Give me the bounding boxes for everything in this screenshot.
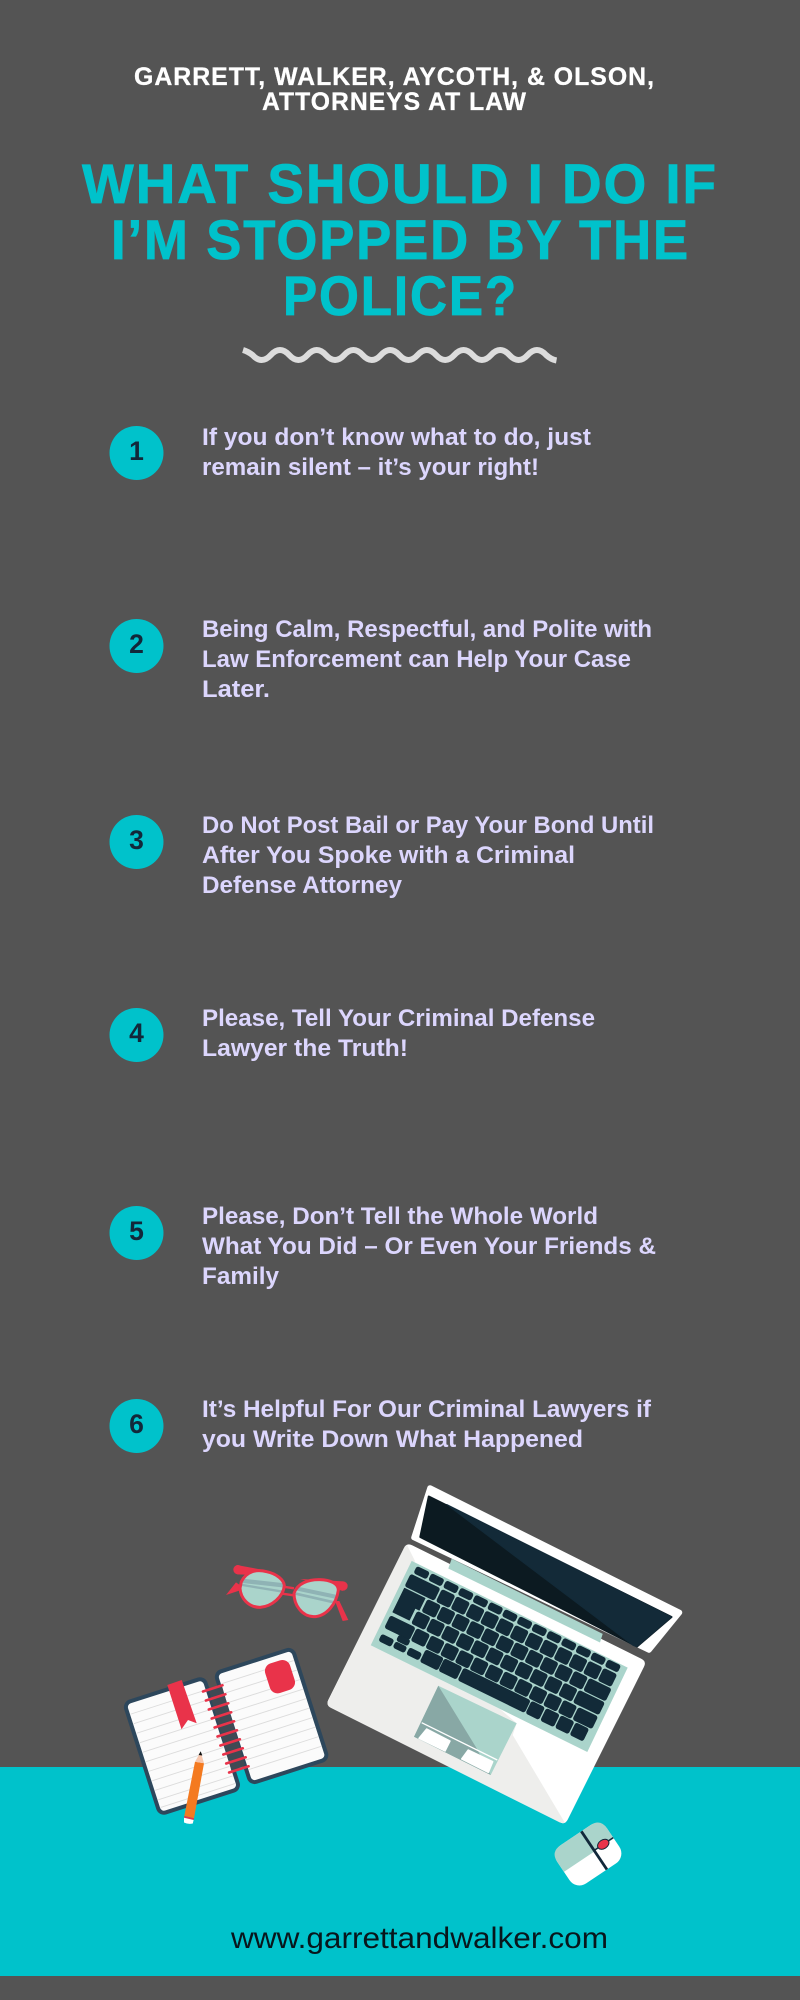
number badge 5	[110, 1206, 164, 1260]
item 4	[110, 1005, 595, 1062]
number badge 5: 5	[129, 1216, 144, 1246]
laptop screen	[420, 1496, 672, 1646]
number badge 4: 4	[129, 1018, 144, 1048]
trackpad	[414, 1686, 517, 1775]
hinge	[412, 1543, 637, 1655]
item 5 text: What You Did – Or Even Your Friends &	[202, 1233, 656, 1260]
item 1 text: If you don’t know what to do, just	[202, 424, 591, 451]
glasses bridge	[283, 1587, 294, 1595]
item 3 text: After You Spoke with a Criminal	[202, 842, 575, 869]
item 3 text: Defense Attorney	[202, 872, 403, 899]
item 3	[110, 812, 654, 899]
item 1 text: remain silent – it’s your right!	[202, 454, 539, 481]
item 4 text: Lawyer the Truth!	[202, 1035, 408, 1062]
item 6 text	[202, 1396, 652, 1453]
notebook left page	[124, 1678, 240, 1814]
item 6 text: It’s Helpful For Our Criminal Lawyers if	[202, 1396, 652, 1423]
notebook right page	[215, 1648, 328, 1784]
item 5 text	[202, 1203, 656, 1290]
firm name heading: GARRETT, WALKER, AYCOTH, & OLSON,	[134, 63, 655, 91]
bookmark	[167, 1680, 197, 1729]
right lens	[293, 1580, 340, 1617]
laptop lid	[414, 1488, 680, 1650]
item 3 text	[202, 812, 654, 899]
number badge 6: 6	[129, 1409, 144, 1439]
left lens	[238, 1571, 287, 1607]
notebook spiral rings	[203, 1685, 249, 1772]
laptop base	[320, 1541, 645, 1828]
item 5 text: Please, Don’t Tell the Whole World	[202, 1203, 598, 1230]
number badge 1: 1	[129, 436, 144, 466]
item 5 text: Family	[202, 1263, 280, 1290]
firm name heading: ATTORNEYS AT LAW	[262, 88, 527, 116]
item 2 text: Later.	[202, 676, 270, 703]
icon: red glasses	[226, 1565, 348, 1621]
item 1	[110, 424, 591, 481]
number badge 3	[110, 815, 164, 869]
number badge 4	[110, 1008, 164, 1062]
website url: www.garrettandwalker.com	[230, 1922, 608, 1955]
teal footer band	[0, 1767, 800, 1976]
title: I’M STOPPED BY THE	[111, 208, 690, 271]
number badge 6	[110, 1399, 164, 1453]
pencil	[184, 1751, 204, 1824]
item 4 text: Please, Tell Your Criminal Defense	[202, 1005, 595, 1032]
icon: laptop	[320, 1488, 680, 1828]
title: WHAT SHOULD I DO IF	[82, 152, 718, 215]
title: POLICE?	[283, 264, 518, 327]
item 4 text	[202, 1005, 595, 1062]
number badge 2	[110, 619, 164, 673]
icon: mouse	[551, 1818, 626, 1890]
title	[82, 152, 718, 327]
item 5	[110, 1203, 656, 1290]
keyboard keys	[378, 1566, 622, 1742]
item 2 text: Being Calm, Respectful, and Polite with	[202, 616, 652, 643]
number badge 3: 3	[129, 825, 144, 855]
item 6 text: you Write Down What Happened	[202, 1426, 583, 1453]
number badge 2: 2	[129, 629, 144, 659]
hinge strip	[448, 1559, 603, 1642]
wavy divider	[243, 350, 556, 360]
item 6	[110, 1396, 652, 1453]
item 2 text: Law Enforcement can Help Your Case	[202, 646, 631, 673]
notebook spine	[208, 1685, 245, 1772]
firm name heading	[134, 63, 655, 116]
number badge 1	[110, 426, 164, 480]
icon: spiral notebook	[124, 1648, 328, 1824]
item 2 text	[202, 616, 652, 703]
glasses arms	[226, 1582, 241, 1595]
keyboard deck	[371, 1561, 628, 1752]
item 3 text: Do Not Post Bail or Pay Your Bond Until	[202, 812, 654, 839]
item 1 text	[202, 424, 591, 481]
item 2	[110, 616, 652, 703]
